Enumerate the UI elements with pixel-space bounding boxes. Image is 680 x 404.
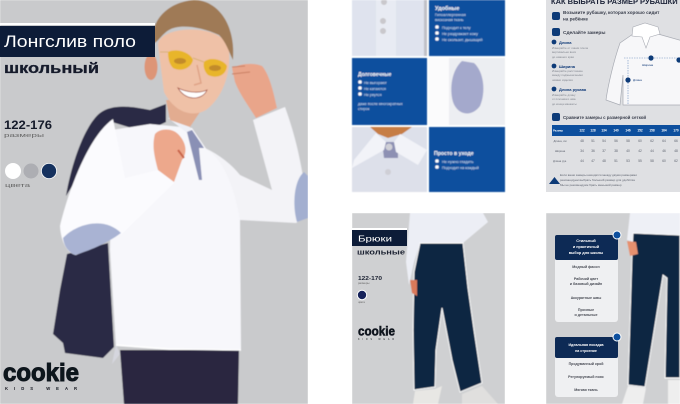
step 1: на ребёнке — [563, 16, 588, 22]
card: durable — [352, 58, 427, 125]
card: comfortable — [429, 0, 505, 56]
hand — [410, 280, 417, 296]
photo: placket detail — [352, 0, 427, 56]
shirt diagram: Длина — [633, 78, 642, 82]
size table: 51 — [614, 159, 618, 163]
size table: Размер — [553, 128, 563, 132]
size table: Ширина — [555, 149, 566, 153]
size table: 140 — [613, 128, 619, 132]
measurement list — [552, 40, 588, 106]
card: style benefits: Стильный — [576, 239, 596, 243]
card: style benefits: и детальные — [575, 313, 597, 317]
subtitle: школьный — [4, 60, 99, 77]
size table: 48 — [674, 149, 678, 153]
hair — [153, 0, 233, 60]
cookie logo: cookie — [3, 359, 79, 387]
size table: 170 — [673, 128, 679, 132]
warning note: Мы не рекомендуем брать меньший размер — [560, 183, 622, 187]
size table: 36 — [591, 149, 595, 153]
sizes: 122-176 — [4, 120, 52, 132]
photo: elbow patch — [448, 58, 505, 125]
card: easy care — [429, 127, 505, 192]
card: durable: стирок — [358, 107, 370, 111]
trousers logo: cookie — [358, 324, 395, 338]
panel: longsleeve polo hero — [0, 0, 308, 404]
trousers swatch: цвета — [358, 301, 365, 304]
size table: 164 — [661, 128, 667, 132]
hand — [627, 241, 638, 256]
cookie logo: KIDS WEAR — [5, 386, 77, 391]
size table: 47 — [591, 159, 595, 163]
size table: 38 — [614, 149, 618, 153]
card: style benefits: Прочные — [578, 308, 594, 312]
step 3: Сравните замеры с размерной сеткой — [563, 115, 646, 120]
size table: 40 — [626, 149, 630, 153]
card: durable: даже после многократных — [358, 102, 403, 106]
card: style benefits — [555, 231, 621, 322]
size table: 60 — [662, 159, 666, 163]
shirt diagram — [606, 23, 680, 105]
panel: trousers benefits — [546, 213, 680, 404]
collar — [168, 118, 190, 131]
measurement list: Измеряйте от линии плеча — [552, 46, 588, 50]
card: style benefits: Аккуратные швы — [571, 296, 601, 300]
card: durable: Не выгорают — [364, 81, 387, 85]
panel: fabric features grid — [352, 0, 505, 192]
measurement list: до нижнего края — [552, 55, 574, 59]
size table: 53 — [626, 159, 630, 163]
card: comfortable: Подходит к телу — [442, 26, 471, 30]
size table: 42 — [638, 149, 642, 153]
neck — [166, 100, 200, 128]
measurement list: между подмышечными — [552, 73, 583, 77]
left sleeve — [60, 118, 116, 256]
trousers title: школьные — [357, 250, 405, 256]
size table: 37 — [602, 149, 606, 153]
card: fit benefits: Продуманный крой — [569, 362, 603, 366]
size table: 58 — [626, 139, 630, 143]
card: comfortable: Удобные — [435, 5, 459, 12]
measurement list: от плечевого шва — [552, 97, 576, 101]
sizes: размеры — [4, 133, 44, 139]
panel: size guide — [546, 0, 680, 192]
card: fit benefits: Идеальная посадка — [568, 343, 605, 347]
size table: 48 — [580, 139, 584, 143]
measurement list: Ширина — [559, 64, 576, 69]
size table — [552, 125, 680, 163]
hand on shoulder — [154, 130, 185, 182]
card: fit benefits — [555, 333, 621, 397]
smile — [178, 88, 207, 98]
step 2 — [552, 28, 605, 36]
step 2: Сделайте замеры — [563, 29, 605, 36]
card: comfortable: вискозная ткань — [435, 18, 464, 22]
shirt body — [110, 124, 241, 350]
white shirt back — [406, 213, 488, 285]
card: fit benefits: на строение — [575, 349, 597, 353]
shirt sleeve: right raised arm — [205, 107, 308, 223]
step 3 — [552, 113, 646, 121]
card: durable: Долговечные — [358, 72, 392, 78]
nose shadow — [194, 65, 201, 85]
card: easy care: Не нужно гладить — [442, 160, 473, 164]
photo: collar — [352, 127, 427, 192]
size table: 152 — [637, 128, 643, 132]
shirt diagram: Ширина — [642, 63, 653, 67]
card: style benefits: выбор для школы — [569, 251, 603, 255]
warning note: рекомендуем выбрать больший размер для удобства — [560, 178, 635, 182]
measurement list: швами изделия — [552, 78, 573, 82]
size table: 66 — [674, 139, 678, 143]
trousers swatch — [357, 290, 367, 304]
ear — [144, 54, 158, 80]
card: comfortable: Не скользит, дышащий — [442, 38, 482, 42]
card: comfortable: Гипоаллергенная — [435, 13, 466, 17]
card: fit benefits: Мягкая ткань — [574, 388, 598, 392]
size table: Длина рук. — [553, 159, 567, 163]
card: comfortable: Не раздражает кожу — [442, 32, 478, 36]
size table: 128 — [590, 128, 596, 132]
measurement list: Измеряйте расстояние — [552, 69, 583, 73]
warning note — [549, 174, 637, 186]
size table: 54 — [602, 139, 606, 143]
card: fit benefits: Регулируемый пояс — [568, 375, 604, 379]
size table: 48 — [602, 159, 606, 163]
card: style benefits: и практичный — [573, 245, 600, 249]
title bar — [0, 23, 155, 57]
size table: 122 — [579, 128, 585, 132]
trousers back view — [413, 243, 482, 392]
step 1: Возьмите рубашку, которая хорошо сидит — [563, 9, 660, 15]
trousers title: Брюки — [358, 234, 392, 244]
card: easy care: Просто в уходе — [434, 151, 474, 157]
size table: 62 — [650, 139, 654, 143]
size table: 46 — [662, 149, 666, 153]
head — [158, 29, 229, 113]
measurement list: Длина — [559, 40, 572, 45]
size table: Длина, см — [553, 139, 567, 143]
card: style benefits: Модный фасон — [572, 265, 600, 269]
card: style benefits: и базовый дизайн — [570, 282, 602, 286]
card: durable: Не рвутся — [364, 93, 382, 97]
trousers sizes: размеры — [358, 281, 369, 285]
size table: 158 — [649, 128, 655, 132]
size table: 34 — [580, 149, 584, 153]
size table: 134 — [601, 128, 607, 132]
title text: Лонгслив поло — [4, 33, 136, 51]
size table: 58 — [650, 159, 654, 163]
measurement list: Длина рукава — [559, 87, 587, 92]
colour swatches — [5, 163, 57, 189]
trousers front view — [628, 233, 680, 387]
card: style benefits: Рабочий цвет — [574, 277, 598, 281]
body hem — [192, 349, 242, 352]
colour swatches: цвета — [5, 183, 30, 189]
trousers title — [352, 228, 407, 256]
warning note: Если ваши замеры находятся между двумя размерами — [560, 173, 637, 177]
measurement list: вертикально вниз — [552, 50, 576, 54]
size table: 56 — [614, 139, 618, 143]
card: easy care: Подходит на каждый — [442, 166, 479, 170]
trousers logo: KIDS WEAR — [358, 338, 394, 341]
size table: 62 — [674, 159, 678, 163]
pants — [120, 350, 239, 404]
left elbow patch — [63, 223, 121, 255]
size table: 51 — [591, 139, 595, 143]
measurement list: до конца манжеты — [552, 102, 577, 106]
size table: 55 — [638, 159, 642, 163]
trousers sizes — [358, 276, 382, 285]
size table: 146 — [625, 128, 631, 132]
shoes — [413, 386, 442, 404]
folded navy jacket — [53, 104, 166, 358]
sizes — [4, 120, 52, 139]
raised hand — [232, 64, 277, 118]
size table: 60 — [638, 139, 642, 143]
shoes — [622, 386, 646, 404]
size table: 44 — [650, 149, 654, 153]
shirt front — [627, 213, 680, 242]
step 1 — [552, 10, 660, 22]
right elbow patch — [294, 172, 308, 222]
panel: school trousers — [352, 213, 505, 404]
size table: 44 — [580, 159, 584, 163]
size table: 64 — [662, 139, 666, 143]
measurement list: Измеряйте длину — [552, 93, 576, 97]
yellow glasses — [160, 50, 227, 77]
card: durable: Не катаются — [364, 87, 386, 91]
trousers sizes: 122-170 — [358, 276, 382, 282]
